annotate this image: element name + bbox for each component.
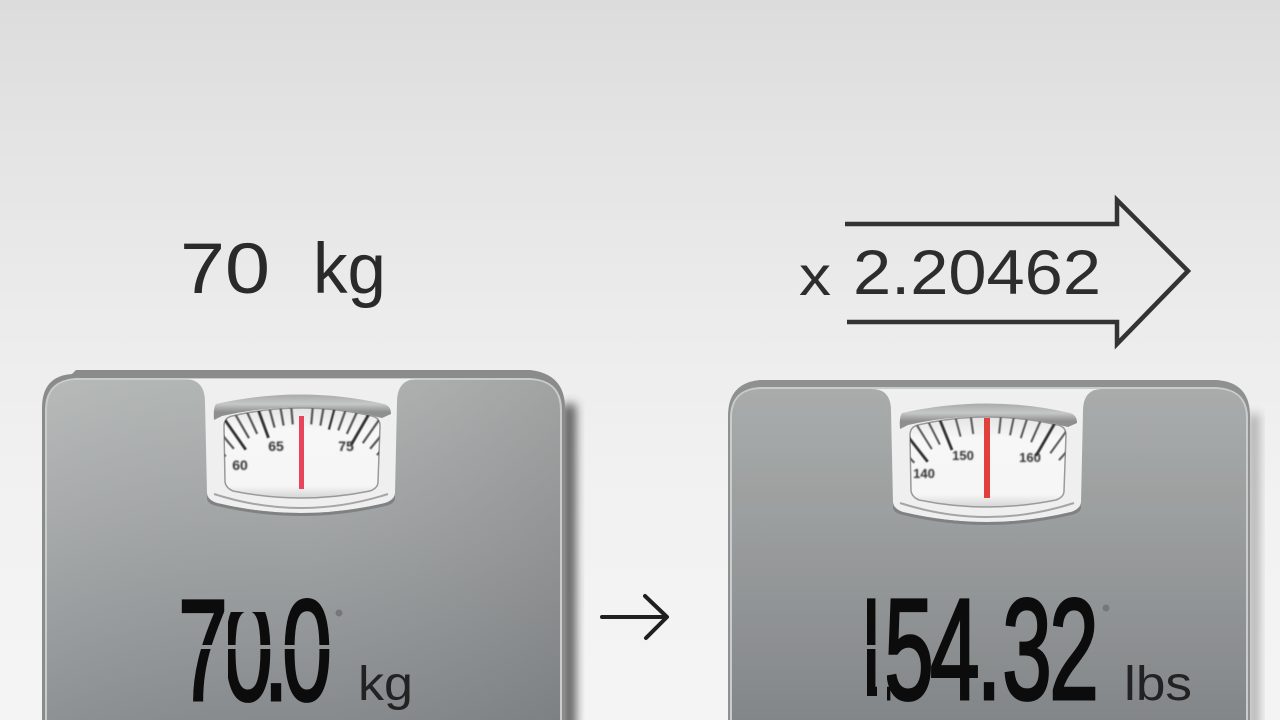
needle bbox=[299, 416, 304, 489]
dial numbers: 75 bbox=[338, 438, 354, 454]
heading: 70 kg: 70 bbox=[180, 230, 270, 309]
dial ticks bbox=[224, 408, 380, 458]
dial numbers bbox=[232, 438, 354, 473]
dial numbers: 65 bbox=[268, 438, 284, 454]
scale rim bbox=[42, 370, 565, 720]
arrow: small result arrow bbox=[602, 596, 667, 638]
dial numbers: 160 bbox=[1019, 450, 1041, 465]
scale body bbox=[732, 389, 1246, 720]
heading: 70 kg: kg bbox=[313, 230, 386, 309]
unit: lbs: lbs bbox=[1124, 658, 1192, 711]
dial numbers: 140 bbox=[913, 466, 935, 481]
needle bbox=[984, 418, 990, 498]
scale: pounds bbox=[728, 380, 1259, 720]
arrow: large outlined conversion arrow bbox=[845, 200, 1188, 344]
dial window bbox=[910, 417, 1066, 507]
LCD marker bbox=[336, 610, 342, 616]
scale rim bbox=[728, 380, 1250, 720]
dial housing bbox=[186, 379, 416, 513]
dial housing bbox=[872, 389, 1102, 522]
scale: kilograms bbox=[42, 370, 576, 720]
dial window bbox=[224, 408, 380, 498]
LCD marker bbox=[1102, 604, 1110, 612]
heading: 70 kg bbox=[180, 230, 386, 309]
scale body bbox=[47, 380, 560, 720]
multiplier: x 2.20462: x bbox=[799, 244, 831, 307]
dial numbers: 150 bbox=[952, 448, 974, 463]
dial numbers bbox=[913, 448, 1041, 481]
dial ticks bbox=[910, 417, 1066, 464]
multiplier: x 2.20462: 2.20462 bbox=[853, 238, 1101, 308]
dial numbers: 60 bbox=[232, 457, 248, 473]
dial assembly bbox=[872, 389, 1102, 525]
unit: kg: kg bbox=[358, 658, 413, 711]
